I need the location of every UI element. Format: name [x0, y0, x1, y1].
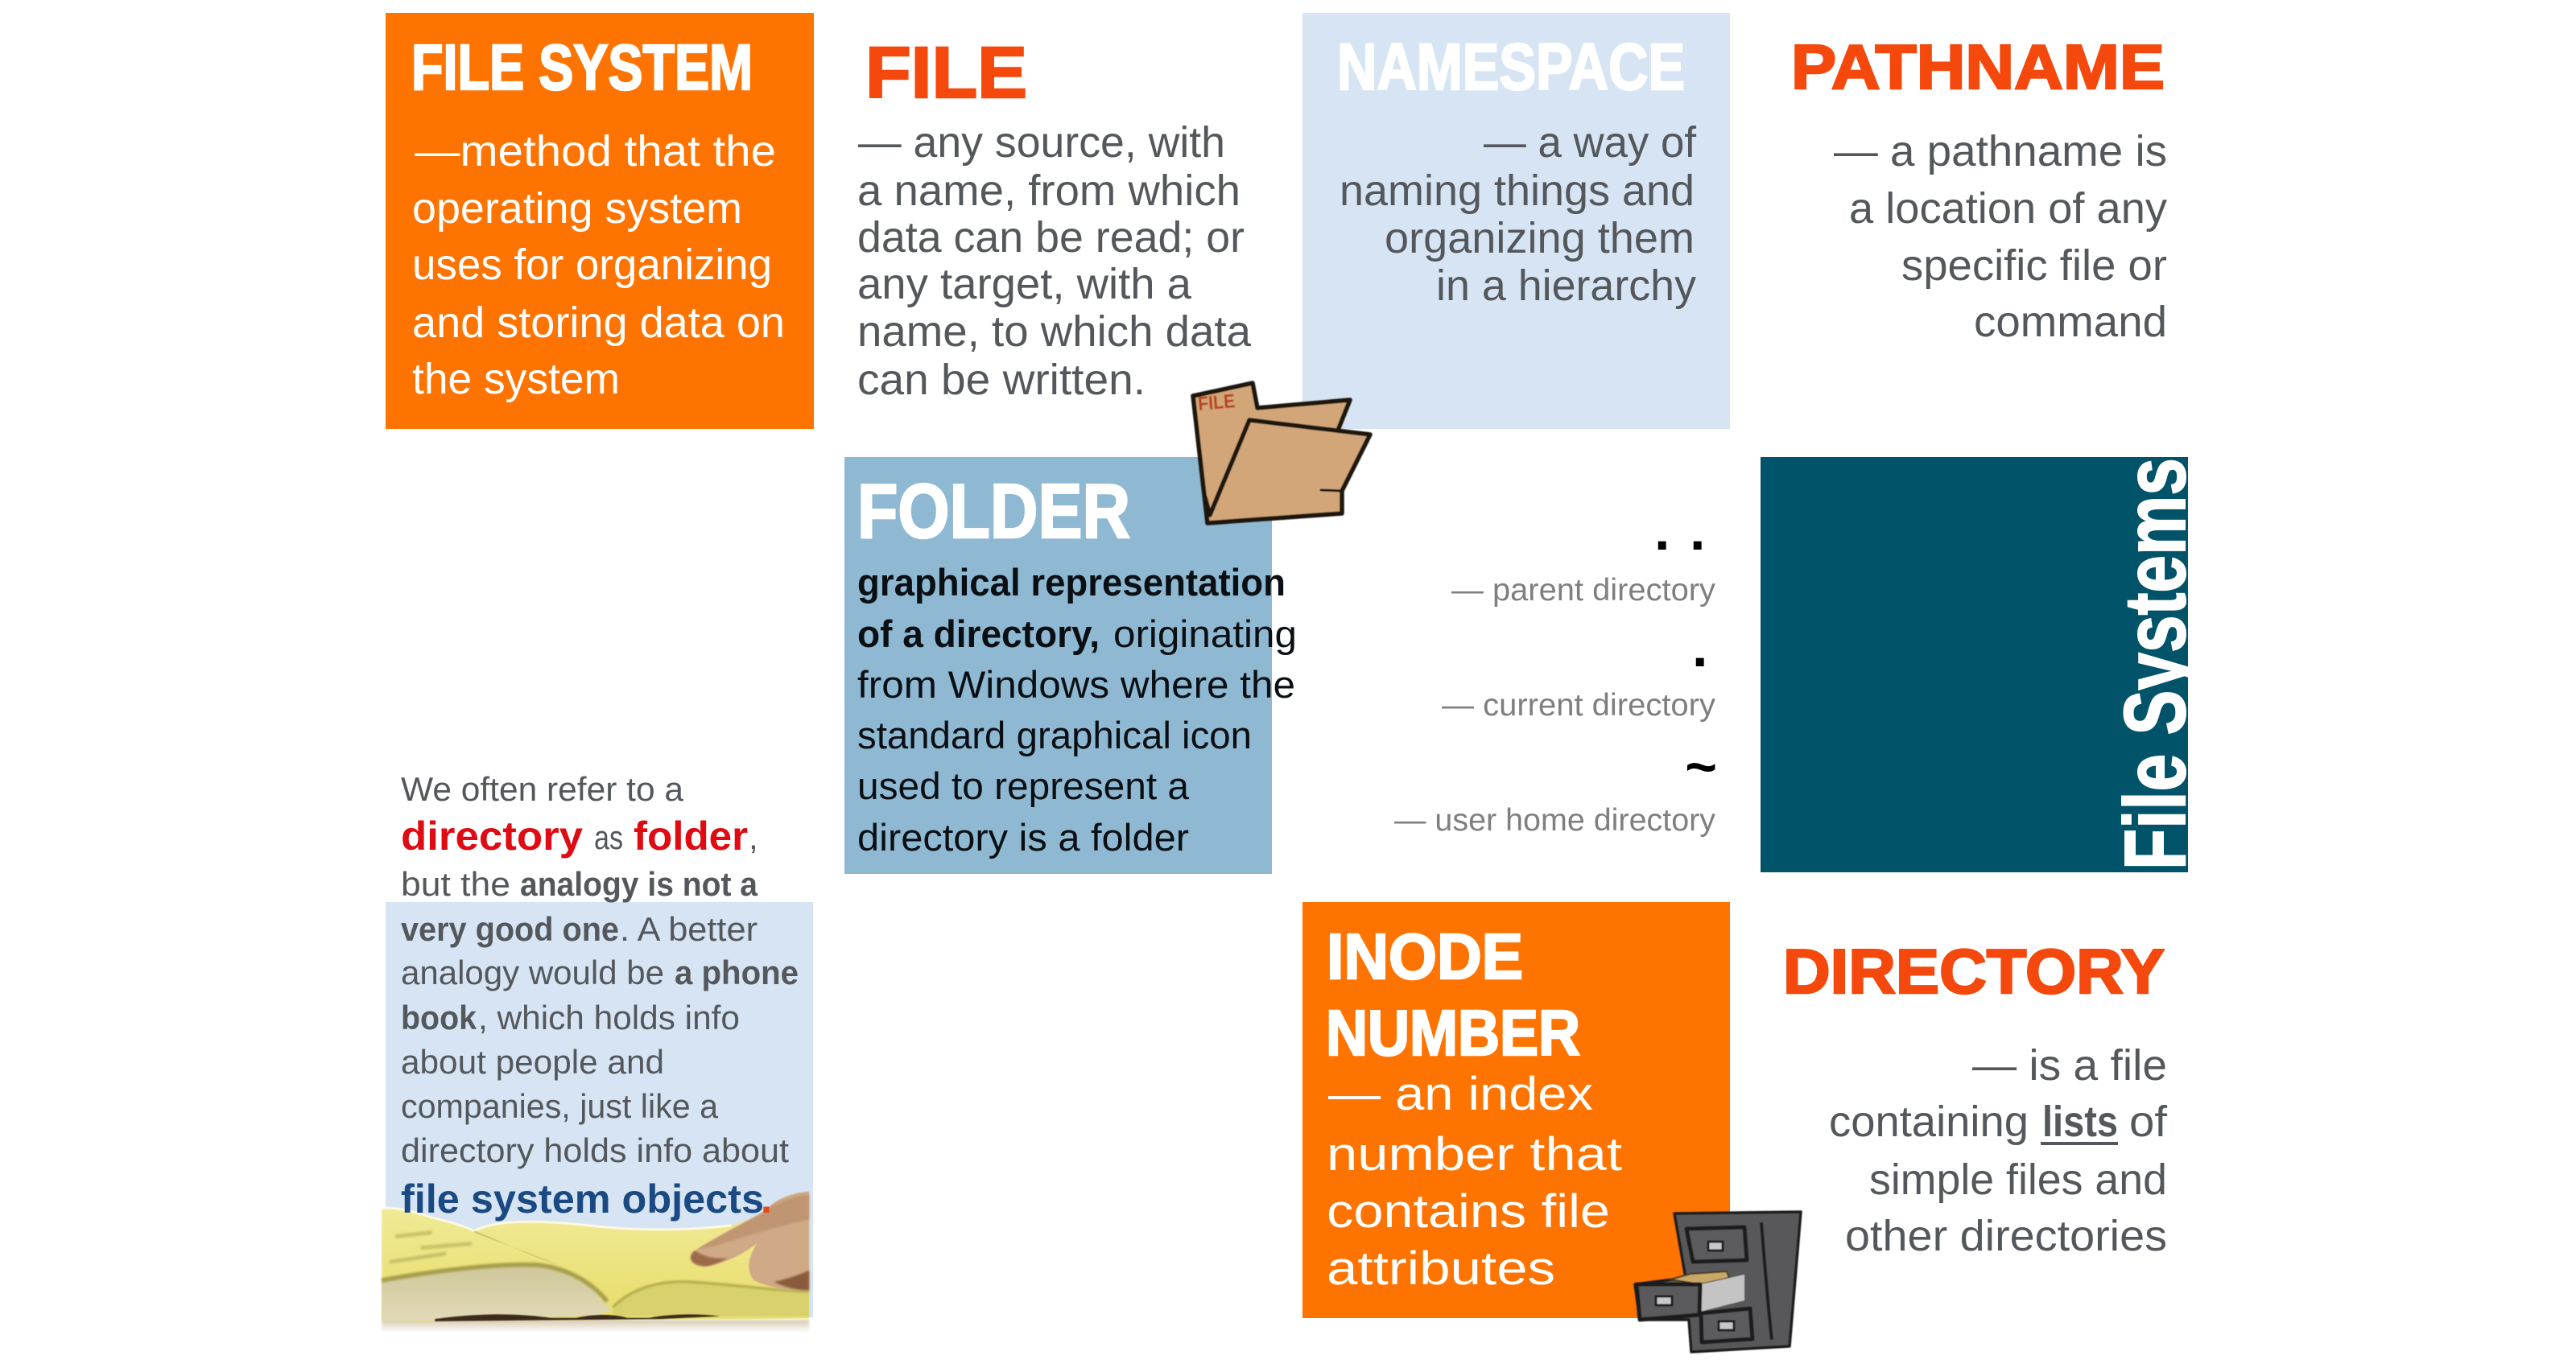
definition: pathname: command [1974, 298, 2167, 346]
definition: pathname: specific file or [1901, 241, 2167, 290]
definition: folder: from Windows where the [857, 663, 1295, 706]
definition: file: can be written. [857, 356, 1146, 404]
definition: inode number [1327, 1068, 1622, 1295]
definition: file: — any source, with [858, 118, 1225, 167]
panel: directory [1783, 936, 2168, 1260]
heading: pathname: PATHNAME [1791, 31, 2165, 102]
definition: file system: the system [412, 355, 620, 403]
definition: folder: used to represent a [857, 764, 1190, 807]
analogy text: , [749, 818, 758, 856]
panel: pathname [1791, 31, 2167, 346]
definition: directory: simple files and [1869, 1156, 2167, 1204]
analogy text: book [401, 999, 477, 1036]
title: File Systems [2106, 458, 2203, 870]
analogy text: about people and [401, 1043, 664, 1081]
analogy text: directory holds info about [401, 1131, 789, 1169]
analogy text: file system objects [401, 1176, 764, 1222]
analogy text: . A better [620, 910, 758, 948]
label: parent directory: — parent directory [1451, 573, 1715, 608]
heading: file: FILE [865, 33, 1027, 113]
definition: namespace [1340, 118, 1697, 310]
heading: directory: DIRECTORY [1783, 936, 2165, 1007]
definition: file system: operating system [412, 184, 742, 233]
analogy text: . [761, 1176, 772, 1222]
analogy text: a phone [675, 954, 799, 991]
definition: folder: graphical representation [857, 561, 1286, 604]
analogy text: companies, just like a [401, 1087, 719, 1125]
icon: filing cabinet [1635, 1212, 1801, 1352]
definition: file system: and storing data on [412, 299, 785, 347]
analogy text: analogy is not a [520, 865, 758, 903]
definition: pathname: — a pathname is [1834, 127, 2167, 175]
analogy text: analogy would be [401, 954, 664, 991]
definition: directory: other directories [1845, 1212, 2167, 1260]
definition: pathname: a location of any [1849, 184, 2167, 233]
definition: folder: directory is a folder [857, 816, 1189, 859]
analogy text: but the [401, 865, 510, 903]
label: user home directory: — user home directory [1394, 803, 1715, 838]
heading: inode number [1326, 921, 1580, 1069]
analogy text: directory [401, 814, 583, 859]
definition: file system: uses for organizing [412, 241, 772, 289]
analogy text: We often refer to a [401, 770, 684, 808]
panel: phone book analogy [382, 770, 813, 1333]
panel: file [857, 33, 1252, 404]
panel: file system [386, 13, 814, 429]
heading: file system: FILE SYSTEM [411, 31, 753, 103]
definition: directory: lists [2042, 1098, 2118, 1146]
symbol: user home directory: ~ [1685, 736, 1717, 797]
definition: namespace: in a hierarchy [1436, 262, 1696, 310]
panel: directory symbols [1394, 499, 1717, 838]
definition: folder: of a directory, [857, 612, 1100, 655]
analogy text: , which holds info [478, 999, 740, 1036]
panel: title [1761, 457, 2203, 872]
panel: inode number [1302, 902, 1730, 1318]
definition: pathname [1834, 127, 2167, 346]
panel: namespace [1302, 13, 1730, 429]
illustration: phone book [382, 1192, 809, 1333]
definition: folder: standard graphical icon [857, 714, 1252, 756]
analogy text: as [594, 818, 623, 856]
heading: inode number: NUMBER [1326, 997, 1580, 1069]
heading: inode number: INODE [1327, 921, 1523, 992]
icon: manila folder [1193, 383, 1370, 523]
definition: inode number: number that [1327, 1128, 1622, 1181]
definition: file: any target, with a [857, 260, 1192, 308]
symbol: parent directory: . [1654, 499, 1670, 562]
analogy text [401, 770, 799, 1222]
folder tab label: FILE [1197, 390, 1236, 415]
definition: file system: —method that the [415, 127, 776, 175]
heading: folder: FOLDER [857, 468, 1130, 554]
label: current directory: — current directory [1442, 688, 1715, 723]
definition: inode number: attributes [1327, 1242, 1555, 1295]
definition: inode number: contains file [1327, 1185, 1610, 1238]
definition: file [857, 118, 1252, 404]
definition: directory: of [2129, 1098, 2168, 1146]
analogy text: folder [634, 814, 748, 859]
definition: inode number: — an index [1328, 1068, 1593, 1120]
definition: file: name, to which data [857, 307, 1252, 356]
definition: file: data can be read; or [857, 213, 1245, 262]
definition: file system [412, 127, 785, 403]
definition: namespace: — a way of [1484, 118, 1697, 167]
definition: namespace: naming things and [1340, 167, 1695, 215]
definition: folder [857, 561, 1297, 859]
definition: namespace: organizing them [1385, 214, 1695, 262]
definition: directory: containing [1829, 1098, 2029, 1146]
symbol: parent directory: . [1690, 499, 1705, 562]
analogy text: very good one [401, 910, 619, 948]
definition: folder: originating [1113, 612, 1297, 655]
symbol: current directory: . [1692, 616, 1707, 678]
panel: folder [844, 457, 1297, 874]
definition: directory: — is a file [1972, 1041, 2167, 1090]
definition: directory [1829, 1041, 2168, 1260]
heading: namespace: NAMESPACE [1337, 31, 1685, 104]
symbol: parent directory [1654, 499, 1705, 562]
definition: file: a name, from which [857, 167, 1241, 215]
